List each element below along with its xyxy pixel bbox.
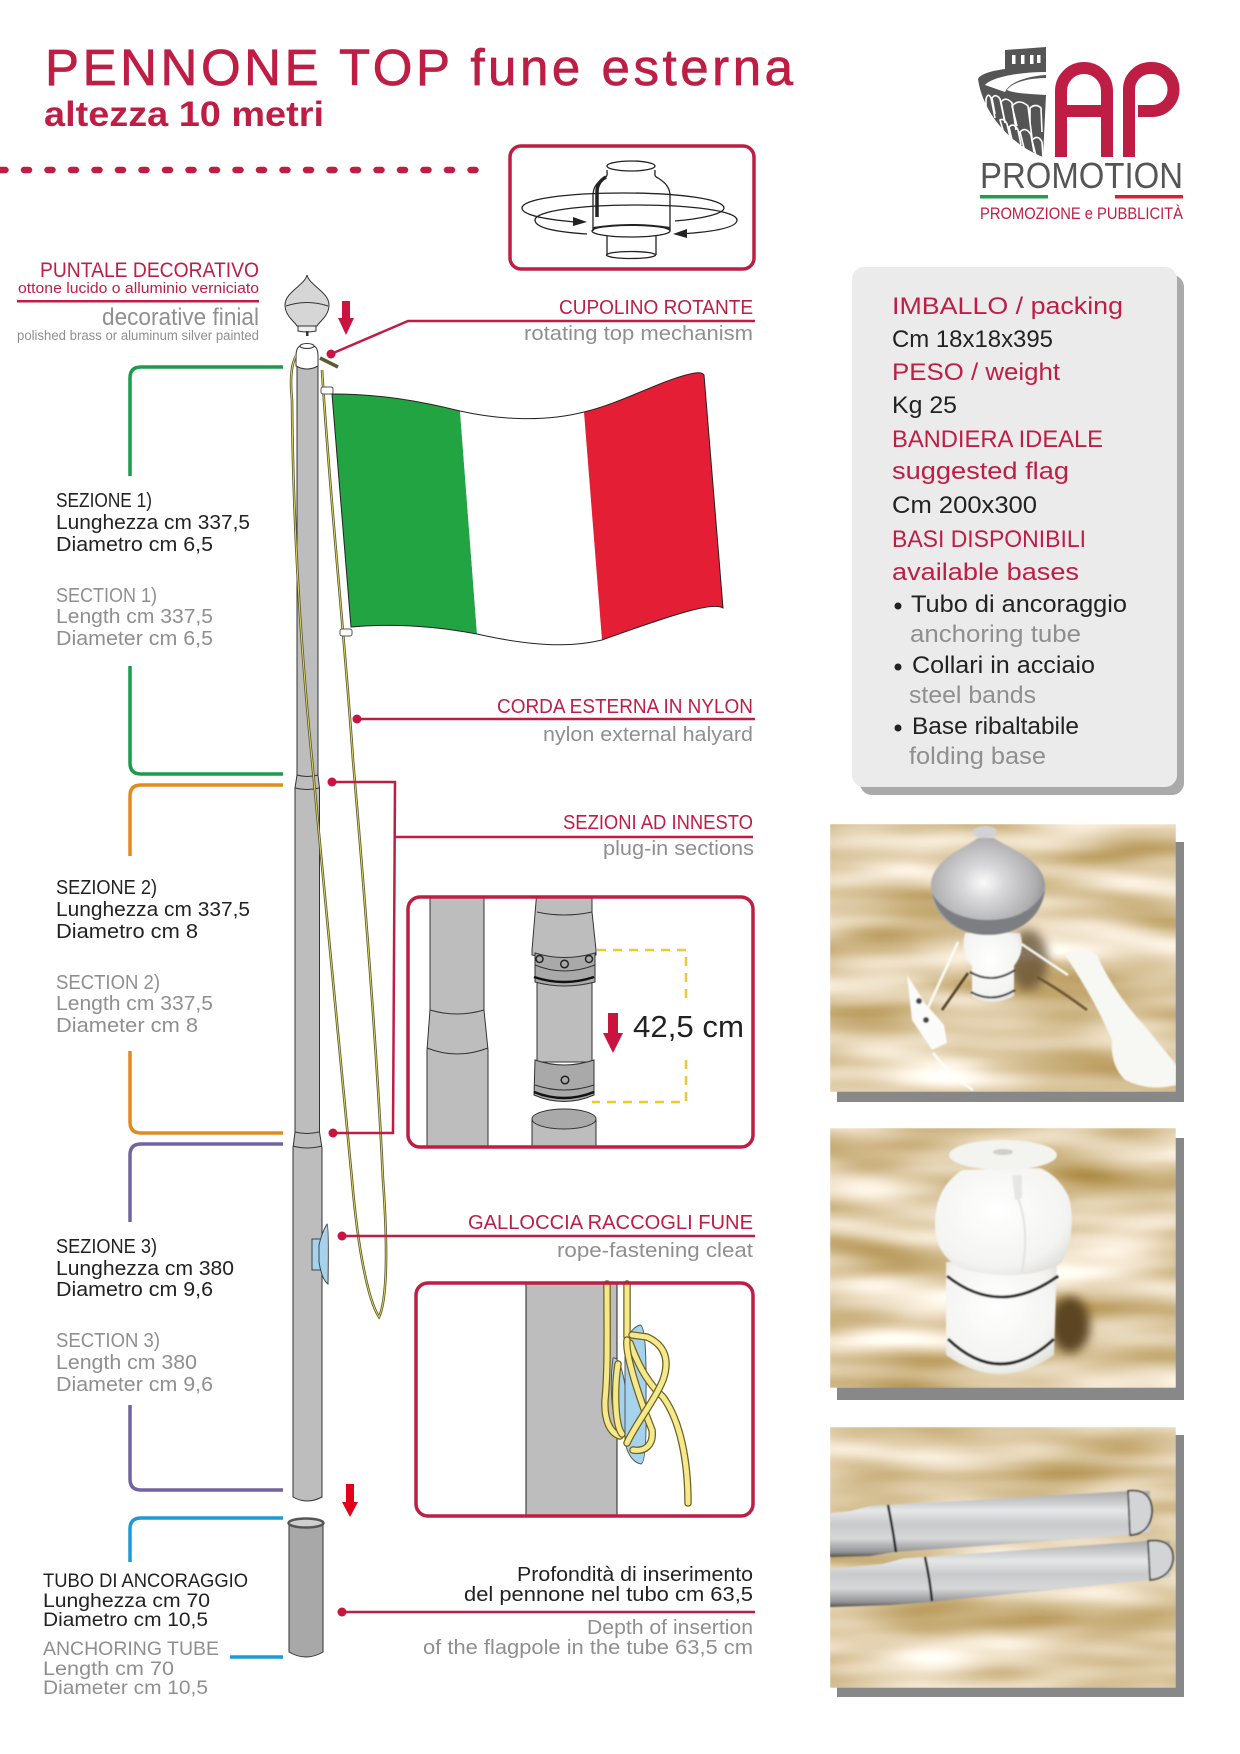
dimension bracket: [592, 950, 686, 1102]
weight: PESO / weight: [892, 359, 1060, 386]
available bases: Collari in acciaio: [912, 652, 1095, 679]
callout: insertion depth: of the flagpole in the tube 63,5 cm: [423, 1637, 753, 1659]
PROMOTION wordmark: PROMOTION: [980, 155, 1183, 196]
available bases: steel bands: [909, 682, 1036, 709]
available bases: BASI DISPONIBILI: [892, 526, 1086, 553]
anchoring tube: [288, 1518, 324, 1657]
label: decorative finial: [17, 259, 259, 343]
bracket: section 2: [130, 785, 283, 1133]
callout: nylon halyard: CORDA ESTERNA IN NYLON: [497, 696, 753, 718]
text: section 1: SECTION 1): [56, 585, 157, 607]
callout: rotating top: CUPOLINO ROTANTE: [559, 297, 753, 319]
text: section 1: Length cm 337,5: [56, 606, 213, 628]
icon: amphitheatre: [978, 47, 1046, 157]
label: decorative finial: ottone lucido o alluminio verniciato: [18, 281, 259, 297]
halyard rope: [291, 356, 386, 1317]
text: section 3: SEZIONE 3): [56, 1236, 157, 1258]
arrow: down: [603, 1013, 623, 1053]
text: section 2: Lunghezza cm 337,5: [56, 899, 250, 921]
suggested flag: suggested flag: [892, 458, 1069, 485]
callout: insertion depth: Depth of insertion: [587, 1617, 753, 1639]
callout: plug-in sections: plug-in sections: [603, 838, 754, 860]
text: section 1: [56, 490, 250, 650]
label: decorative finial: decorative finial: [102, 304, 259, 331]
text: anchoring tube: ANCHORING TUBE: [43, 1638, 219, 1660]
packing: Cm 18x18x395: [892, 326, 1053, 353]
callout: insertion depth: [338, 1564, 755, 1659]
callout: cleat: rope-fastening cleat: [557, 1240, 753, 1262]
right pipe: [532, 898, 596, 957]
weight: Kg 25: [892, 392, 957, 419]
icon: finial: [285, 275, 329, 336]
text: section 1: Diameter cm 6,5: [56, 628, 213, 650]
text: section 2: Diametro cm 8: [56, 921, 198, 943]
lower pipe end: [532, 1118, 596, 1146]
callout: nylon halyard: [352, 696, 755, 746]
text: anchoring tube: Lunghezza cm 70: [43, 1590, 210, 1612]
callout: nylon halyard: nylon external halyard: [543, 724, 753, 746]
photo: finial with rope and cleat: [830, 824, 1184, 1102]
text: anchoring tube: Diameter cm 10,5: [43, 1677, 208, 1699]
text: section 3: [56, 1236, 234, 1396]
panel: plug-in joint detail: [408, 890, 753, 1150]
AP letters: [1061, 68, 1174, 157]
available bases: [892, 526, 1127, 770]
panel: rotating top diagram: [510, 146, 754, 269]
packing: IMBALLO / packing: [892, 293, 1123, 320]
left pipe: [427, 890, 488, 1150]
text: anchoring tube: Length cm 70: [43, 1658, 174, 1680]
flag: Italian tricolour: [332, 373, 723, 645]
callout: rotating top: [326, 297, 755, 358]
logo tagline: PROMOZIONE e PUBBLICITÀ: [980, 204, 1183, 223]
text: section 3: Lunghezza cm 380: [56, 1258, 234, 1280]
text: section 2: [56, 877, 250, 1037]
callout: cleat: [338, 1212, 755, 1262]
text: anchoring tube: [43, 1570, 248, 1699]
text: section 1: Diametro cm 6,5: [56, 534, 213, 556]
weight: [892, 359, 1060, 419]
subtitle: altezza 10 metri: [44, 95, 324, 134]
callout: rotating top: rotating top mechanism: [524, 323, 753, 345]
title: PENNONE TOP fune esterna: [45, 39, 794, 96]
text: section 3: SECTION 3): [56, 1330, 160, 1352]
photo: white plastic rotating top: [830, 1128, 1184, 1400]
label: decorative finial: polished brass or aluminum silver painted: [17, 328, 259, 343]
logo: AP Promotion: [978, 47, 1183, 223]
suggested flag: BANDIERA IDEALE: [892, 426, 1103, 453]
panel: specifications: [852, 267, 1184, 795]
text: section 1: Lunghezza cm 337,5: [56, 512, 250, 534]
arrow: finial down: [338, 301, 354, 335]
callout: plug-in sections: [328, 778, 754, 1138]
packing: [892, 293, 1123, 353]
callout: insertion depth: Profondità di inserimento: [517, 1564, 753, 1586]
photo: aluminium pole sections: [830, 1427, 1184, 1697]
text: anchoring tube: TUBO DI ANCORAGGIO: [43, 1570, 248, 1592]
flagpole: [293, 344, 322, 1501]
dimension label: 42,5 cm: [633, 1009, 744, 1044]
available bases: Tubo di ancoraggio: [911, 591, 1127, 618]
text: section 1: SEZIONE 1): [56, 490, 152, 512]
suggested flag: Cm 200x300: [892, 492, 1037, 519]
available bases: available bases: [892, 559, 1079, 586]
bracket: anchoring tube: [130, 1518, 283, 1657]
bracket: section 1: [130, 367, 283, 774]
text: section 2: Length cm 337,5: [56, 993, 213, 1015]
text: section 3: Length cm 380: [56, 1352, 197, 1374]
text: section 3: Diametro cm 9,6: [56, 1279, 213, 1301]
icon: cleat on pole: [312, 1224, 328, 1284]
rotating top cap: [296, 346, 318, 369]
text: section 2: SECTION 2): [56, 972, 160, 994]
available bases: folding base: [909, 743, 1046, 770]
text: section 2: Diameter cm 8: [56, 1015, 198, 1037]
bracket: section 3: [130, 1144, 283, 1490]
panel: cleat knot detail: [416, 1283, 753, 1516]
arrow: pole into tube: [342, 1484, 358, 1517]
available bases: anchoring tube: [910, 621, 1081, 648]
available bases: Base ribaltabile: [912, 713, 1079, 740]
label: decorative finial: PUNTALE DECORATIVO: [40, 259, 259, 282]
text: section 2: SEZIONE 2): [56, 877, 157, 899]
text: anchoring tube: Diametro cm 10,5: [43, 1609, 208, 1631]
callout: cleat: GALLOCCIA RACCOGLI FUNE: [468, 1212, 753, 1234]
text: section 3: Diameter cm 9,6: [56, 1374, 213, 1396]
callout: insertion depth: del pennone nel tubo cm 63,5: [464, 1584, 753, 1606]
suggested flag: [892, 426, 1103, 519]
callout: plug-in sections: SEZIONI AD INNESTO: [563, 812, 753, 834]
